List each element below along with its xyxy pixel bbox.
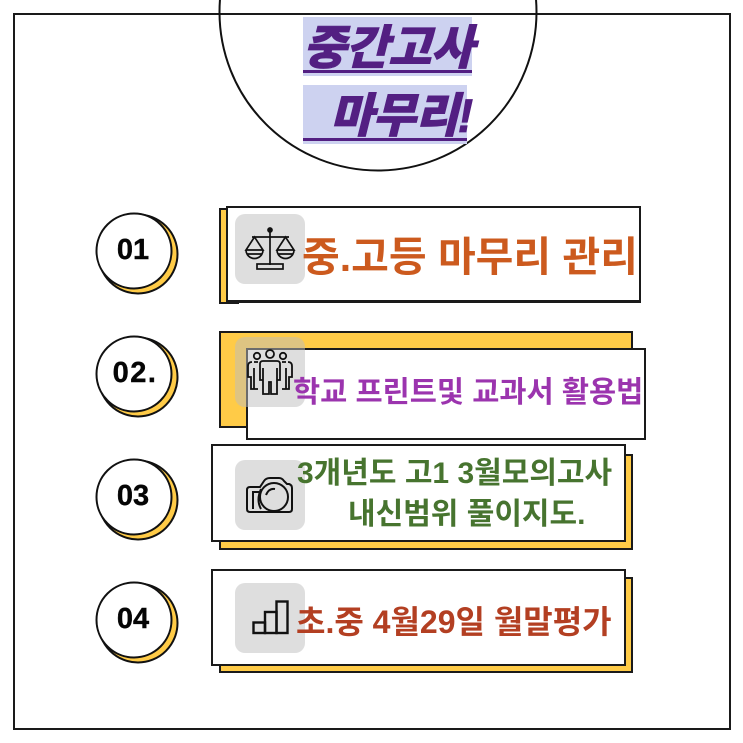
number 04: 04 (117, 603, 149, 635)
card 3 subheading: 내신범위 풀이지도. (348, 498, 585, 531)
card 1 heading: 중.고등 마무리 관리 (302, 234, 638, 280)
title line 2 highlight (303, 85, 467, 144)
icon tile 2 (235, 337, 305, 407)
title line 2: 마무리! (330, 89, 473, 142)
card 3 yellow backing (219, 454, 633, 550)
title line 1: 중간고사 (303, 21, 473, 74)
badge 03 (96, 458, 178, 540)
card 3 heading: 3개년도 고1 3월모의고사 (297, 457, 612, 490)
icon tile 3 (235, 460, 305, 530)
icon tile 1 (235, 214, 305, 284)
number 02: 02. (113, 357, 157, 389)
title line 1 highlight (303, 17, 472, 76)
card 2 yellow backing (219, 331, 633, 428)
card 2 white panel (246, 348, 646, 440)
badge 01 (96, 212, 178, 294)
number 01: 01 (117, 234, 149, 266)
card 4 heading: 초.중 4월29일 월말평가 (296, 604, 612, 640)
card 4 white panel (211, 569, 626, 666)
card 1 white panel (226, 206, 641, 303)
card 2 heading: 학교 프린트및 교과서 활용법 (293, 376, 643, 409)
card 4 yellow backing (219, 577, 633, 673)
card 3 white panel (211, 444, 626, 542)
badge 02 (96, 336, 178, 418)
card 1 yellow backing (219, 208, 239, 304)
number 03: 03 (117, 480, 149, 512)
icon tile 4 (235, 583, 305, 653)
badge 04 (96, 582, 178, 664)
